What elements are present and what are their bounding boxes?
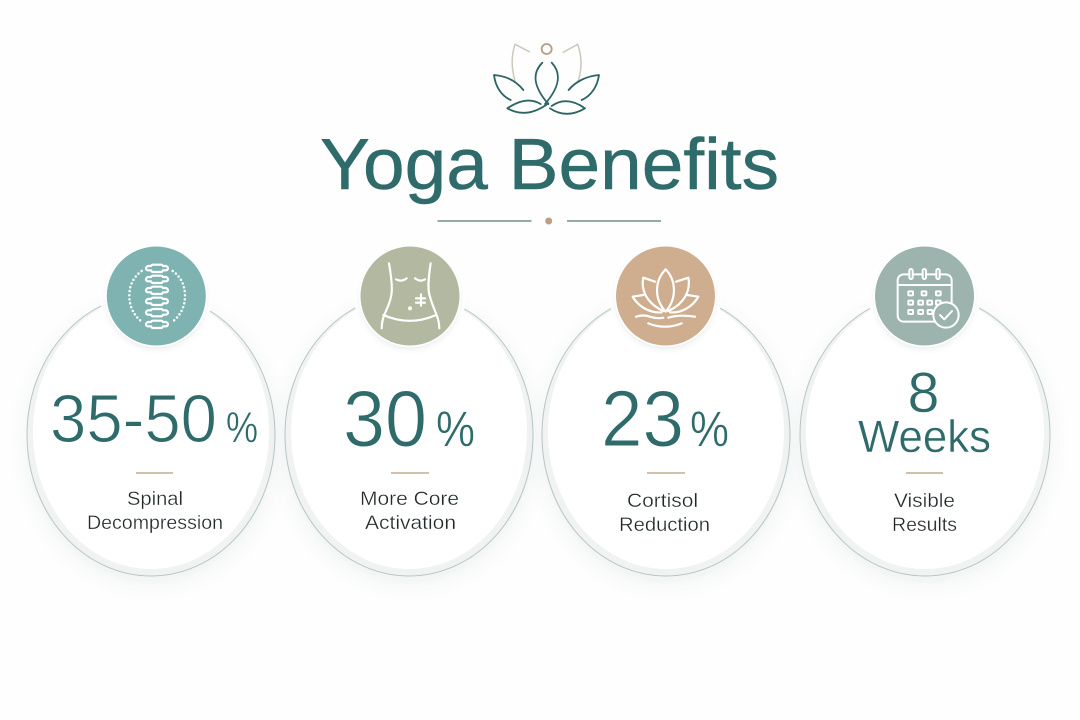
label: cortisol reduction bbox=[619, 490, 710, 536]
label: more core activation: Activation bbox=[365, 512, 456, 534]
icon: torso bbox=[354, 240, 466, 352]
label: cortisol reduction: Reduction bbox=[619, 514, 710, 536]
stat: 8 weeks: Weeks bbox=[858, 411, 991, 462]
stat: 23%: % bbox=[690, 401, 729, 457]
label: spinal decompression: Decompression bbox=[87, 512, 223, 534]
card ellipse bbox=[800, 294, 1050, 576]
stat: 23%: 23 bbox=[601, 374, 684, 463]
stat: 30%: 30 bbox=[343, 374, 427, 463]
stat: 30% bbox=[343, 374, 475, 463]
icon: lotus bbox=[610, 240, 722, 352]
stat: 35-50%: 35-50 bbox=[50, 381, 217, 457]
stat: 23% bbox=[601, 374, 729, 463]
stat: 8 weeks: 8 bbox=[908, 361, 939, 425]
title: Yoga Benefits bbox=[320, 125, 779, 205]
label: visible results bbox=[892, 490, 957, 536]
panel: core activation bbox=[285, 240, 533, 576]
panel: spinal decompression bbox=[27, 240, 275, 576]
icon: spine bbox=[100, 240, 212, 352]
label: more core activation: More Core bbox=[360, 488, 459, 510]
card ellipse bbox=[542, 294, 790, 576]
panel: visible results bbox=[800, 240, 1050, 576]
card ellipse bbox=[27, 294, 275, 576]
title divider bbox=[438, 218, 661, 224]
label: more core activation bbox=[360, 488, 459, 534]
stat: 35-50%: % bbox=[226, 403, 258, 452]
icon: lotus logo bbox=[494, 44, 599, 114]
panel: cortisol reduction bbox=[542, 240, 790, 576]
label: spinal decompression: Spinal bbox=[127, 488, 183, 510]
label: spinal decompression bbox=[87, 488, 223, 534]
label: cortisol reduction: Cortisol bbox=[627, 490, 698, 512]
card ellipse bbox=[285, 294, 533, 576]
stat: 30%: % bbox=[436, 401, 475, 457]
label: visible results: Visible bbox=[894, 490, 955, 512]
label: visible results: Results bbox=[892, 514, 957, 536]
icon: calendar bbox=[868, 240, 980, 352]
stat: 8 weeks bbox=[858, 361, 991, 462]
